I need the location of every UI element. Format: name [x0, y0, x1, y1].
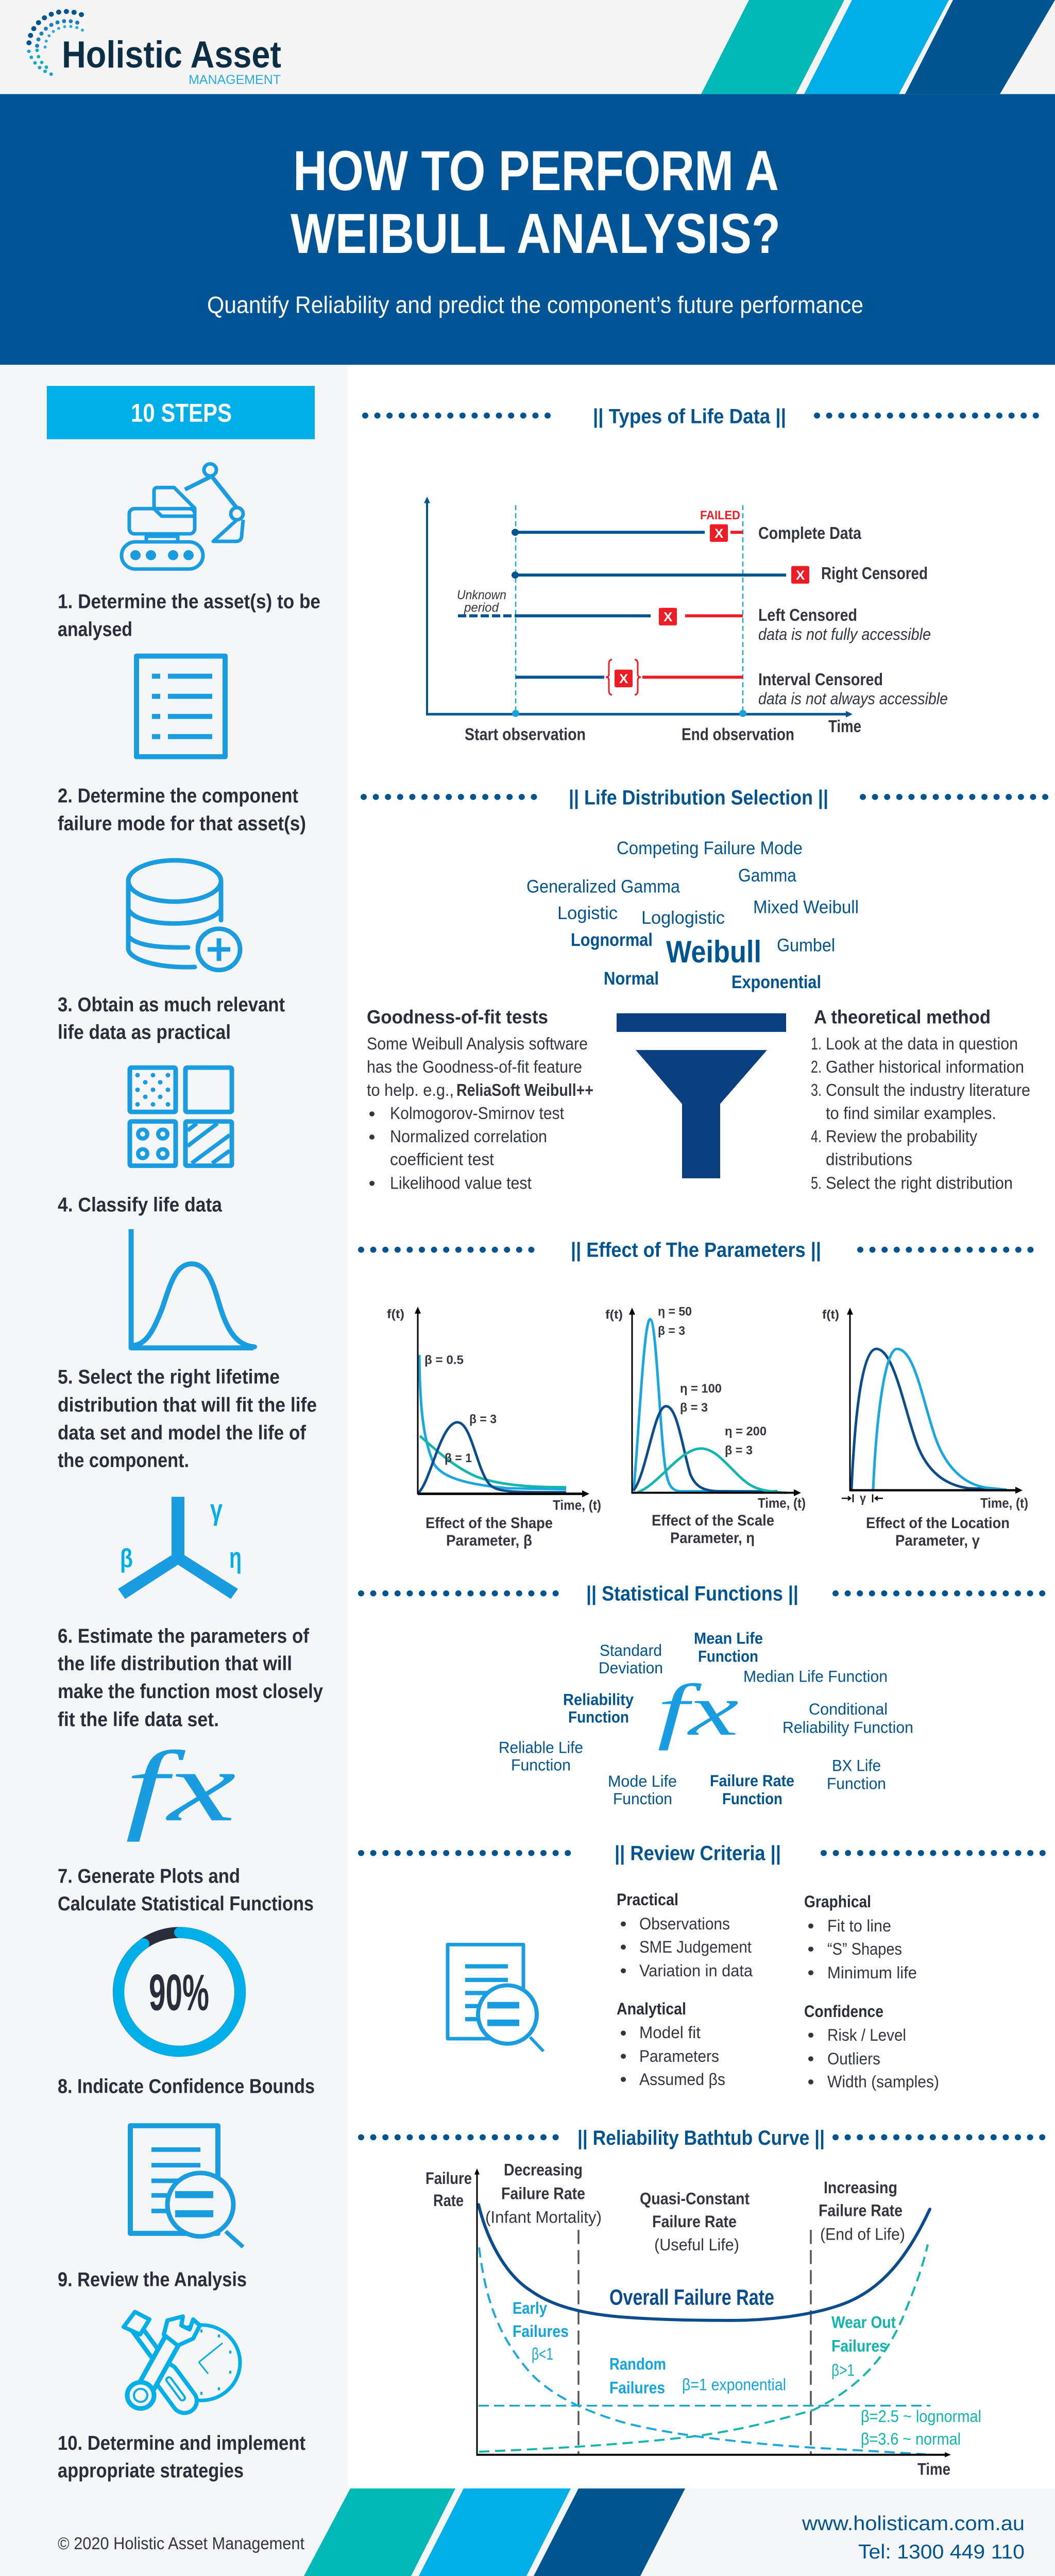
icon: document review [130, 2126, 243, 2247]
word cloud: statistical functions: Mode Life [608, 1772, 677, 1790]
footer band [0, 2488, 1055, 2576]
criteria: confidence: Risk / Level [827, 2025, 906, 2044]
complete data: FAILED [700, 509, 740, 522]
criteria: graphical: Minimum life [827, 1963, 917, 1982]
word cloud: statistical functions: Function [698, 1647, 758, 1666]
word cloud: distributions: Exponential [731, 972, 821, 992]
labels: (Infant Mortality) [485, 2208, 602, 2226]
observation windows [512, 505, 746, 717]
chart: bathtub curve: β=3.6 ~ normal [861, 2429, 961, 2448]
text block: goodness-of-fit tests: Some Weibull Analysis software [367, 1035, 588, 1054]
icon: database plus [128, 860, 240, 970]
criteria: practical: Variation in data [639, 1961, 753, 1980]
word cloud: statistical functions: Reliability [563, 1690, 634, 1708]
icon: funnel [617, 1013, 786, 1178]
labels: Failure Rate [501, 2184, 585, 2202]
left censored: Left Censored [758, 606, 857, 625]
chart: scale parameter: Parameter, η [670, 1530, 755, 1547]
step 7 text: Calculate Statistical Functions [58, 1892, 314, 1915]
step 2 text: failure mode for that asset(s) [58, 812, 306, 835]
contact details: Tel: 1300 449 110 [858, 2540, 1025, 2563]
step 10 text: 10. Determine and implement [58, 2432, 305, 2454]
word cloud: distributions [526, 838, 859, 992]
chart: bathtub curve: β=1 exponential [682, 2375, 786, 2394]
word cloud: statistical functions: Function [613, 1789, 672, 1808]
criteria: confidence: Width (samples) [827, 2072, 939, 2091]
step 9 text: 9. Review the Analysis [58, 2268, 247, 2291]
step 2 text [58, 785, 306, 835]
labels: Increasing [824, 2178, 897, 2197]
heading: effect of the parameters: || Effect of The Parameters || [571, 1238, 821, 1261]
word cloud: statistical functions: Function [722, 1789, 782, 1808]
chart: bathtub curve: β=2.5 ~ lognormal [861, 2407, 981, 2426]
top header band [0, 0, 1055, 94]
left censored: X [663, 610, 672, 624]
step 10 text [58, 2432, 305, 2482]
word cloud: statistical functions: Function [568, 1708, 629, 1726]
step 1 text: analysed [58, 618, 132, 640]
step 4 text: 4. Classify life data [58, 1194, 223, 1216]
criteria: graphical: Graphical [804, 1892, 871, 1911]
logo: Holistic Asset [62, 33, 281, 76]
text block: goodness-of-fit tests: has the Goodness-of-fit feature [367, 1058, 582, 1077]
word cloud: distributions: Competing Failure Mode [617, 838, 803, 858]
icon: 90 percent gauge: 90% [149, 1964, 209, 2021]
criteria: analytical: Assumed βs [639, 2070, 725, 2089]
icon: excavator [122, 464, 243, 569]
criteria: graphical [804, 1892, 917, 1982]
step 5 text [58, 1366, 317, 1472]
word cloud: distributions: Logistic [557, 903, 618, 923]
text block: a theoretical method: 1. [811, 1035, 822, 1054]
criteria: practical: Practical [617, 1890, 678, 1909]
word cloud: statistical functions: Function [827, 1774, 886, 1793]
labels: Failure Rate [652, 2212, 737, 2231]
icon: large fx: fx [657, 1670, 739, 1751]
word cloud: distributions: Generalized Gamma [526, 876, 680, 896]
chart: scale parameter: Time, (t) [758, 1496, 806, 1511]
step 7 text [58, 1865, 314, 1915]
chart: scale parameter: η = 100 [680, 1382, 722, 1396]
left censored [457, 588, 931, 643]
criteria: analytical: Parameters [639, 2046, 719, 2065]
step 6 text: fit the life data set. [58, 1708, 219, 1731]
criteria: analytical [617, 1999, 725, 2089]
axes [424, 497, 853, 718]
title banner [0, 94, 1055, 365]
labels: Decreasing [504, 2160, 583, 2179]
wear out failures curve [479, 2244, 928, 2452]
step 6 text: the life distribution that will [58, 1653, 292, 1675]
chart: shape parameter: Parameter, β [446, 1532, 532, 1549]
chart: shape parameter [387, 1307, 601, 1549]
heading: reliability bathtub curve: || Reliability Bathtub Curve || [577, 2126, 825, 2149]
text block: a theoretical method: 2. [811, 1058, 822, 1077]
axes [474, 2168, 951, 2458]
word cloud: statistical functions [499, 1629, 913, 1808]
step 5 text: distribution that will fit the life [58, 1394, 317, 1416]
title: HOW TO PERFORM A [293, 140, 779, 202]
step 3 text: life data as practical [58, 1021, 231, 1043]
text block: goodness-of-fit tests: ReliaSoft Weibull++ [456, 1081, 593, 1100]
chart: bathtub curve: Failures [831, 2336, 888, 2355]
step 1 text: 1. Determine the asset(s) to be [58, 590, 320, 613]
right censored: Right Censored [821, 564, 928, 583]
word cloud: statistical functions: BX Life [832, 1756, 881, 1774]
chart: bathtub curve: Wear Out [831, 2313, 896, 2331]
chart: scale parameter: f(t) [605, 1308, 623, 1321]
step 7 text: 7. Generate Plots and [58, 1865, 240, 1887]
chart: shape parameter: Time, (t) [553, 1498, 601, 1513]
logo: MANAGEMENT [189, 73, 281, 87]
panel: left steps background [0, 365, 348, 2488]
heading: statistical functions: || Statistical Functions || [586, 1582, 798, 1605]
text block: goodness-of-fit tests: Normalized correlation [390, 1127, 547, 1146]
logo [29, 11, 281, 87]
step 5 text: 5. Select the right lifetime [58, 1366, 280, 1388]
word cloud: statistical functions: Conditional [809, 1700, 888, 1718]
wrench [147, 2340, 173, 2386]
criteria: confidence [804, 2002, 939, 2091]
random failures line [479, 2405, 930, 2406]
criteria: confidence: Outliers [827, 2049, 880, 2068]
text block: a theoretical method: 4. [811, 1127, 822, 1146]
left censored: period [464, 601, 499, 615]
text block: a theoretical method: Consult the industry literature [826, 1081, 1030, 1100]
word cloud: statistical functions: Reliable Life [499, 1738, 583, 1756]
labels: (End of Life) [820, 2225, 905, 2244]
labels: Rate [433, 2191, 464, 2210]
icon: review document [448, 1944, 543, 2051]
icon: tools and clock [124, 2312, 240, 2409]
labels: Time [917, 2460, 950, 2479]
icon: data classification grid [130, 1067, 232, 1166]
chart: location parameter: γ [860, 1492, 866, 1505]
text block: a theoretical method: Look at the data in question [826, 1035, 1018, 1054]
interval censored [516, 659, 948, 708]
chart: types of life data [424, 497, 948, 744]
gamma offset marker [842, 1494, 883, 1502]
text block: goodness-of-fit tests: Kolmogorov-Smirnov test [390, 1104, 565, 1123]
chart: shape parameter: β = 3 [469, 1413, 497, 1427]
interval censored: data is not always accessible [758, 689, 948, 708]
text block: a theoretical method: 5. [811, 1174, 822, 1193]
step 6 text [58, 1625, 323, 1731]
chart: bathtub curve: β>1 [831, 2361, 855, 2379]
icon: 90 percent gauge [118, 1933, 240, 2051]
chart: scale parameter: η = 200 [725, 1425, 767, 1438]
word cloud: distributions: Normal [604, 969, 659, 989]
left censored: data is not fully accessible [758, 625, 931, 643]
text block: a theoretical method: Gather historical information [826, 1058, 1024, 1077]
word cloud: statistical functions: Standard [600, 1641, 662, 1659]
icon: three parameters [118, 1494, 242, 1599]
heading: life distribution selection: || Life Distribution Selection || [569, 786, 828, 809]
chart: location parameter: f(t) [822, 1308, 839, 1321]
chart: location parameter: Time, (t) [980, 1496, 1028, 1511]
axis labels: End observation [682, 725, 794, 744]
word cloud: distributions: Loglogistic [641, 907, 725, 928]
chart: bathtub curve: Failures [609, 2378, 665, 2397]
complete data: X [714, 527, 723, 541]
chart: bathtub curve: Early [513, 2299, 547, 2317]
icon: three parameters: η [229, 1542, 242, 1574]
step 8 text: 8. Indicate Confidence Bounds [58, 2075, 315, 2097]
interval censored: X [619, 672, 628, 686]
criteria: practical: SME Judgement [639, 1937, 752, 1956]
subtitle: Quantify Reliability and predict the component’s future performance [207, 292, 863, 318]
complete data [512, 509, 861, 543]
text block: goodness-of-fit tests: coefficient test [390, 1150, 495, 1170]
step 2 text: 2. Determine the component [58, 785, 298, 807]
axis labels: Time [828, 717, 861, 736]
text block: a theoretical method: A theoretical method [814, 1006, 991, 1027]
word cloud: distributions: Mixed Weibull [753, 897, 859, 917]
word cloud: statistical functions: Failure Rate [710, 1771, 794, 1790]
word cloud: distributions: Lognormal [571, 929, 653, 950]
word cloud: statistical functions: Median Life Function [743, 1667, 888, 1686]
step 5 text: the component. [58, 1449, 189, 1472]
step 5 text: data set and model the life of [58, 1421, 307, 1444]
text block: a theoretical method [811, 1006, 1030, 1193]
labels [426, 2160, 950, 2479]
criteria: practical: Observations [639, 1914, 730, 1933]
early failures curve [479, 2247, 926, 2454]
chart: shape parameter: β = 1 [445, 1451, 472, 1465]
step 3 text: 3. Obtain as much relevant [58, 993, 285, 1016]
text block: a theoretical method: Select the right distribution [826, 1174, 1013, 1193]
axis labels [465, 717, 861, 744]
step 6 text: make the function most closely [58, 1680, 323, 1703]
heading: 10 steps: 10 STEPS [131, 398, 232, 427]
text block: a theoretical method: to find similar examples. [826, 1104, 996, 1123]
labels: (Useful Life) [654, 2235, 739, 2254]
step 6 text: 6. Estimate the parameters of [58, 1625, 310, 1647]
chart: bathtub curve [426, 2160, 981, 2479]
chart: location parameter: Effect of the Location [866, 1515, 1010, 1532]
title [291, 140, 780, 265]
criteria: analytical: Analytical [617, 1999, 686, 2018]
word cloud: statistical functions: Function [511, 1756, 571, 1774]
contact details: www.holisticam.com.au [802, 2513, 1025, 2535]
chart: location parameter [822, 1308, 1028, 1549]
chart: bathtub curve: Overall Failure Rate [609, 2285, 774, 2310]
icon: three parameters: γ [210, 1494, 223, 1527]
criteria: graphical: “S” Shapes [827, 1939, 902, 1958]
labels: Failure Rate [819, 2201, 903, 2220]
heading: review criteria: || Review Criteria || [615, 1841, 781, 1865]
word cloud: distributions: Weibull [666, 935, 761, 969]
axis labels: Start observation [465, 725, 586, 744]
text block: goodness-of-fit tests [367, 1006, 593, 1193]
text block: goodness-of-fit tests: Goodness-of-fit tests [367, 1006, 548, 1027]
complete data: Complete Data [758, 524, 861, 543]
chart: scale parameter: β = 3 [658, 1324, 685, 1338]
criteria: analytical: Model fit [639, 2023, 701, 2042]
title: WEIBULL ANALYSIS? [291, 202, 780, 265]
word cloud: statistical functions: Reliability Function [782, 1718, 913, 1736]
copyright: © 2020 Holistic Asset Management [58, 2535, 305, 2553]
heading: 10 steps [47, 386, 315, 439]
screwdriver [133, 2324, 164, 2366]
right censored: X [796, 568, 805, 583]
labels: Failure [426, 2169, 472, 2188]
text block: goodness-of-fit tests: to help. e.g., [367, 1081, 454, 1100]
text block: a theoretical method: 3. [811, 1081, 822, 1100]
chart: scale parameter [605, 1305, 806, 1547]
chart: scale parameter: η = 50 [658, 1305, 692, 1319]
heading: types of life data: || Types of Life Data || [593, 404, 786, 428]
chart: scale parameter: Effect of the Scale [652, 1512, 774, 1529]
step 10 text: appropriate strategies [58, 2460, 244, 2482]
word cloud: statistical functions: Deviation [599, 1658, 663, 1677]
chart: scale parameter: β = 3 [680, 1401, 708, 1415]
icon: three parameters: β [120, 1544, 133, 1573]
criteria: practical [617, 1890, 753, 1980]
contact details [802, 2513, 1025, 2563]
left censored: Unknown [457, 588, 506, 602]
chart: bathtub curve: Failures [513, 2321, 569, 2341]
overall failure rate curve [479, 2205, 930, 2320]
chart: shape parameter: β = 0.5 [424, 1353, 464, 1367]
chart: location parameter: Parameter, γ [895, 1532, 980, 1549]
chart: bathtub curve: β<1 [532, 2344, 553, 2363]
chart: shape parameter: Effect of the Shape [426, 1515, 553, 1532]
criteria: graphical: Fit to line [827, 1916, 891, 1935]
step 3 text [58, 993, 285, 1043]
phase dividers [578, 2230, 811, 2455]
text block: goodness-of-fit tests: Likelihood value test [390, 1174, 532, 1193]
labels: Quasi-Constant [640, 2189, 750, 2208]
chart: scale parameter: β = 3 [725, 1444, 753, 1458]
step 1 text [58, 590, 320, 640]
icon: list document [137, 656, 225, 757]
chart: bathtub curve: Random [609, 2354, 666, 2374]
right censored [512, 564, 928, 584]
text block: a theoretical method: Review the probability [826, 1127, 977, 1146]
word cloud: distributions: Gumbel [777, 935, 835, 956]
icon: distribution curve [131, 1229, 254, 1348]
interval censored: Interval Censored [758, 670, 883, 689]
icon: fx: fx [125, 1731, 236, 1842]
text block: a theoretical method: distributions [826, 1150, 912, 1170]
word cloud: statistical functions: Mean Life [694, 1629, 763, 1647]
word cloud: distributions: Gamma [738, 865, 796, 886]
chart: shape parameter: f(t) [387, 1308, 404, 1321]
criteria: confidence: Confidence [804, 2002, 883, 2021]
